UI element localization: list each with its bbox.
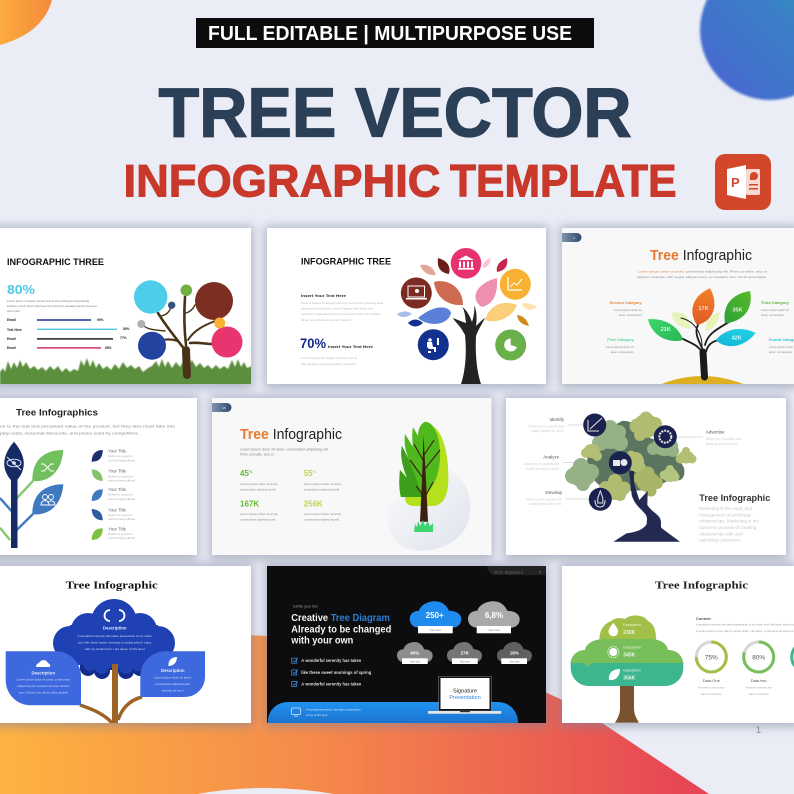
- donut 75%: taken possession: [701, 692, 722, 696]
- crown bottom layer: [571, 663, 683, 686]
- cloud 250+: 250+: [426, 611, 444, 620]
- footer monitor icon and text: [292, 707, 361, 717]
- heading: [290, 613, 391, 647]
- donut 75%: [696, 642, 726, 696]
- signature pill: [487, 566, 546, 575]
- icon: advertise: [654, 425, 677, 448]
- left box: Description: [31, 670, 55, 675]
- right box: Lorem ipsum dolor sit amet,: [154, 676, 192, 680]
- right label: Allows you to quickly and: [706, 437, 742, 441]
- legend: service being offered: [108, 458, 135, 462]
- trunk: [11, 480, 18, 548]
- heading: Tree Infographic: [66, 580, 158, 592]
- leaf 35K: 35K: [732, 308, 743, 314]
- cloud 27K: [447, 642, 482, 664]
- tree branches: [143, 297, 215, 375]
- text block one: typesetting industry. Lorem Ipsum has been the: [301, 306, 373, 310]
- left labels: easily spread the word.: [529, 502, 562, 506]
- content text: Content: [696, 616, 711, 621]
- icon: powerpoint: [715, 154, 771, 210]
- tree: [680, 318, 730, 380]
- category labels: First Category: [607, 337, 635, 342]
- donut 80%: Wonderful serenity has: [745, 686, 773, 690]
- stats: consectetur adipiscing elit.: [240, 518, 276, 522]
- left labels: Develop: [545, 490, 562, 495]
- tree trunk: [613, 471, 680, 542]
- text: tree infographic: Tree Infographic: [699, 493, 770, 503]
- stat 70%: Insert Your Text Here: [328, 345, 373, 349]
- tree leaves: [397, 258, 537, 326]
- footer monitor icon and text: A wonderful serenity has taken possession: [306, 707, 361, 711]
- donut 80%: Data two: [751, 678, 767, 683]
- checklist: like these sweet mornings of spring: [301, 670, 372, 675]
- stat 70%: [300, 338, 373, 366]
- leader lines: [563, 425, 703, 499]
- icon: analyze: [609, 451, 632, 474]
- right box: [140, 651, 205, 697]
- legend: Your Title: [108, 526, 127, 531]
- category labels: amet, consectetur: [611, 350, 634, 354]
- legend: Refers to a good or: [108, 454, 133, 458]
- grass: [0, 358, 252, 385]
- category labels: Lorem ipsum dolor sit: [614, 308, 642, 312]
- panel: slide tree infographics with legend: [0, 398, 197, 555]
- legend: service being offered: [108, 479, 135, 483]
- leaf: shuffle: [32, 450, 63, 481]
- crown text: Description: [103, 626, 127, 631]
- body text: [7, 300, 97, 313]
- cloud 40%: Your text: [410, 659, 420, 663]
- left labels: Allows you to quickly and: [526, 498, 562, 502]
- legend: service being offered: [108, 536, 135, 540]
- circle: person at desk: [418, 329, 449, 360]
- checklist: [292, 658, 372, 686]
- panel: slide infographic tree: [267, 228, 546, 384]
- heading: Tree Infographics: [16, 408, 98, 419]
- stats: consectetur adipiscing elit.: [304, 518, 340, 522]
- panel: slide tree infographic with stats: [212, 398, 492, 555]
- category labels: [606, 300, 794, 354]
- intro text: Lorem ipsum dolor sit amet, consectetur adipiscing elit. Proin convallis, arcu in: [638, 270, 767, 274]
- cloud 18%: Your text: [509, 659, 520, 663]
- text block one: Lorem Ipsum is simply dummy text of the printing and: [301, 301, 383, 305]
- heading: Creative Tree Diagram: [291, 613, 390, 624]
- text block one: when an unknown printer took a: [301, 318, 351, 322]
- text: tree infographic: satisfying customers.: [699, 538, 741, 543]
- left box: [6, 651, 81, 705]
- text: tree infographic: relationships with and: [699, 531, 743, 536]
- category labels: Second Category: [610, 300, 643, 305]
- intro text: Proin convallis, arcu in: [240, 453, 274, 457]
- slide shadows: [0, 226, 794, 727]
- crown top layer: [599, 615, 656, 645]
- tree illustration: [387, 422, 470, 551]
- pale leaves: [671, 312, 720, 331]
- crown labels: Description: [623, 646, 641, 650]
- stats: Lorem ipsum dolor sit amet,: [240, 482, 278, 486]
- crown labels: [608, 623, 641, 682]
- content text: [696, 616, 794, 633]
- cloud 6,8%: 6,8%: [485, 611, 503, 620]
- donut 75%: Wonderful serenity has: [698, 686, 725, 690]
- text: tree infographic: management of exchange: [699, 512, 752, 517]
- intro text: [0, 425, 175, 436]
- heading: INFOGRAPHIC THREE: [7, 257, 104, 267]
- cloud 40%: 40%: [410, 650, 419, 656]
- ground: [662, 376, 743, 384]
- legend: Your Title: [108, 487, 127, 492]
- bar chart: 77%: [120, 336, 127, 340]
- leaf 17K: 17K: [698, 306, 709, 312]
- stat 80%: 80%: [7, 282, 35, 297]
- tree crown: [53, 599, 175, 674]
- bar chart: [7, 318, 130, 350]
- tab: [212, 403, 232, 412]
- stat 70%: the printing and typesetting industry.: [301, 362, 356, 366]
- crown text: with my whole heart. I am alone, in this amet: [85, 647, 145, 651]
- cloud 18%: [497, 642, 532, 664]
- trunk: [615, 686, 639, 723]
- stats: consectetur adipiscing elit.: [304, 488, 340, 492]
- stats: 55: [304, 469, 313, 478]
- bar chart: Text Here: [7, 328, 22, 332]
- icon: powerpoint: P: [731, 175, 740, 190]
- signature pill: 2022 Signature: [494, 570, 523, 574]
- trunk and branches: [80, 664, 142, 723]
- cloud 250+: [410, 601, 461, 633]
- stats: [240, 469, 342, 522]
- legend: Refers to a good or: [108, 532, 133, 536]
- text: tree infographic: business process of creating: [699, 525, 757, 530]
- heading: Tree Infographic: [240, 427, 342, 443]
- heading: with your own: [290, 636, 353, 647]
- left box: adipiscing elit. Aenean sit amet ultrices: [17, 684, 70, 688]
- text block one: Insert Your Text Here: [301, 294, 346, 298]
- left labels: [524, 417, 565, 506]
- circle: pie chart: [495, 330, 526, 360]
- cloud 6,8%: [468, 601, 520, 633]
- intro text: Lorem ipsum dolor sit amet, consectetur adipiscing elit.: [240, 448, 329, 452]
- bar chart: 65%: [105, 346, 112, 350]
- circle: bank: [451, 248, 481, 279]
- stats: 167K: [240, 500, 259, 509]
- category labels: amet, consectetur: [761, 313, 784, 317]
- bar chart: 90%: [97, 318, 104, 322]
- stats: Lorem ipsum dolor sit amet,: [304, 512, 342, 516]
- subtitle: Subtitle goes here: [292, 605, 318, 609]
- crown shadow scallops: [80, 660, 148, 679]
- category labels: amet, consectetur: [619, 313, 642, 317]
- panel: slide green tree: [562, 566, 794, 723]
- checklist: A wonderful serenity has taken: [301, 658, 362, 663]
- text block one: industry's standard dummy text ever since the 1500s,: [301, 312, 381, 316]
- stats: %: [313, 469, 317, 474]
- heading: Tree Infographic: [650, 248, 752, 264]
- crown labels: Description: [623, 669, 641, 673]
- donut 75%: 75%: [705, 654, 718, 662]
- body text: industry. Lorem Ipsum has been the industry's standard dummy text ever: [7, 305, 97, 308]
- stat 70%: Lorem Ipsum is simply dummy text of: [301, 356, 357, 360]
- stats: 256K: [304, 500, 323, 509]
- tab: [562, 233, 582, 242]
- donut 80%: taken possession: [749, 692, 769, 696]
- legend: Refers to a good or: [108, 493, 133, 497]
- body text: since the: [7, 310, 21, 313]
- bar chart: Email: [7, 318, 16, 322]
- crown labels: 230K: [623, 630, 636, 636]
- panel: slide infographic three: [0, 228, 252, 385]
- heading: Already to be changed: [291, 624, 391, 635]
- legend: service being offered: [108, 497, 135, 501]
- legend: Your Title: [108, 448, 127, 453]
- laptop: Signature: [453, 688, 477, 694]
- leaf 17K: [692, 288, 714, 325]
- intro text: aliquam molestie, nibh augue aliquam arcu, eu interdum sem nisl sit amet ligula: [637, 275, 766, 279]
- leaf 42K: 42K: [732, 336, 742, 342]
- donut 80%: [744, 642, 774, 696]
- stats: Lorem ipsum dolor sit amet,: [304, 482, 342, 486]
- crown labels: Description: [623, 623, 641, 627]
- crown text: soul, like these sweet mornings of spring which I enjoy: [78, 640, 152, 644]
- right box: Aenean sit amet: [162, 688, 184, 692]
- legend: Refers to a good or: [108, 513, 133, 517]
- tab: 4: [573, 236, 575, 240]
- leaf: people: [32, 484, 63, 514]
- body text: Lorem Ipsum is simply dummy text of the printing and typesetting: [7, 300, 90, 303]
- subtitle: infographic template: TEMPLATE: [450, 156, 676, 206]
- leaf 21K: 21K: [661, 327, 671, 333]
- text: tree infographic: [699, 493, 770, 543]
- left labels: Allows you to quickly and: [528, 424, 564, 428]
- donut 80%: 80%: [752, 654, 765, 662]
- category labels: Lorem ipsum dolor sit: [606, 345, 634, 349]
- right label: [706, 430, 742, 446]
- blue footer bar: [268, 702, 518, 723]
- cloud 27K: Your text: [460, 659, 470, 663]
- checklist: A wonderful serenity has taken: [301, 681, 362, 686]
- stats: Lorem ipsum dolor sit amet,: [240, 512, 278, 516]
- leaf 21K: [648, 319, 683, 341]
- subtitle: infographic template: INFOGRAPHIC: [124, 156, 440, 206]
- decorative orange blob top left: [0, 0, 52, 45]
- left labels: Analyze: [543, 455, 560, 460]
- heading: INFOGRAPHIC TREE: [301, 256, 391, 266]
- title: tree vector: TREE VECTOR: [158, 74, 632, 152]
- category labels: Third Category: [761, 300, 790, 305]
- panel: slide tree infographic with leaves: [562, 228, 794, 384]
- icon: identify: [583, 414, 606, 436]
- crown text: [78, 610, 152, 651]
- tab: 15: [222, 406, 226, 410]
- stats: 45: [240, 469, 249, 478]
- bar chart: Email: [7, 337, 16, 341]
- stats: %: [249, 469, 253, 474]
- right label: Advertise: [706, 430, 725, 435]
- left labels: Allows you to quickly and: [524, 462, 560, 466]
- cloud 250+: Your text: [429, 628, 441, 632]
- leaf: eye: [4, 442, 24, 483]
- leaf 42K: [716, 329, 756, 346]
- crown labels: 356K: [623, 676, 636, 682]
- left labels: Identify: [549, 417, 565, 422]
- intro text: [637, 270, 767, 278]
- left labels: easily spread the word.: [531, 429, 564, 433]
- crown labels: 345K: [623, 653, 636, 659]
- white curve at bottom edge: [197, 788, 334, 794]
- decorative orange to red gradient wave at the bottom: [0, 634, 709, 794]
- tree crown: [565, 412, 696, 501]
- circle: laptop: [401, 278, 432, 308]
- intro text: pply costs, seasonal discounts, and prices used by competitors.: [0, 430, 139, 435]
- right box: consectetur adipiscing elit.: [155, 682, 191, 686]
- category labels: Lorem ipsum dolor sit: [761, 308, 789, 312]
- stat 70%: 70%: [300, 335, 327, 351]
- cloud 27K: 27K: [460, 650, 470, 656]
- panel: slide blue tree: [0, 566, 251, 723]
- cloud 18%: 18%: [510, 650, 519, 656]
- signature pill: 8: [539, 570, 541, 574]
- intro text: ce to the real and perceived value of the product, but they also must take into: [0, 423, 176, 428]
- stats: consectetur adipiscing elit.: [240, 488, 276, 492]
- cloud 6,8%: Your text: [488, 628, 500, 632]
- banner: full editable: FULL EDITABLE | MULTIPURPOSE USE: [208, 23, 572, 45]
- icon: develop: [589, 488, 612, 511]
- subtitle: infographic template: [124, 156, 676, 206]
- legend: Your Title: [108, 469, 127, 474]
- right label: easily spread the word.: [706, 442, 739, 446]
- left box: Lorem ipsum dolor sit amet, consectetur: [16, 678, 70, 682]
- text: tree infographic: Marketing is the study and: [699, 506, 752, 511]
- text: tree infographic: relationships. Marketing is the: [699, 519, 759, 524]
- decorative blue circle top right: [700, 0, 794, 100]
- panel: slide marketing tree: [506, 398, 786, 555]
- bar chart: 80%: [123, 327, 130, 331]
- intro text: [240, 448, 329, 457]
- panel: slide creative tree diagram (dark): [267, 566, 546, 723]
- legend: Your Title: [108, 507, 127, 512]
- left box: sem. Donec non elit eu tellus lacinia: [19, 691, 68, 695]
- crown middle layer: [571, 639, 683, 667]
- category labels: amet, consectetur: [769, 350, 792, 354]
- heading: Tree Infographic: [655, 580, 748, 592]
- banner: full editable: [196, 18, 594, 48]
- legend: [92, 448, 135, 540]
- leaf 35K: [724, 291, 751, 323]
- laptop: Presentation: [449, 695, 481, 701]
- text block one: [301, 294, 383, 322]
- page number: 1: [756, 725, 761, 736]
- tree circles: [134, 280, 242, 360]
- right box: Description: [161, 668, 185, 673]
- footer monitor icon and text: of my entire soul: [306, 713, 328, 717]
- laptop: [428, 676, 501, 714]
- left labels: easily spread the word.: [527, 467, 559, 471]
- branches: [0, 481, 33, 540]
- legend: service being offered: [108, 517, 135, 521]
- legend: Refers to a good or: [108, 474, 133, 478]
- circle: chart: [500, 269, 531, 300]
- bar chart: Email: [7, 346, 16, 350]
- cloud 40%: [397, 642, 433, 664]
- crown text: A wonderful serenity has taken possession of my entire: [78, 634, 152, 638]
- donut partial: [792, 642, 794, 672]
- donut 75%: Data One: [703, 678, 721, 683]
- tree trunk: [453, 305, 485, 384]
